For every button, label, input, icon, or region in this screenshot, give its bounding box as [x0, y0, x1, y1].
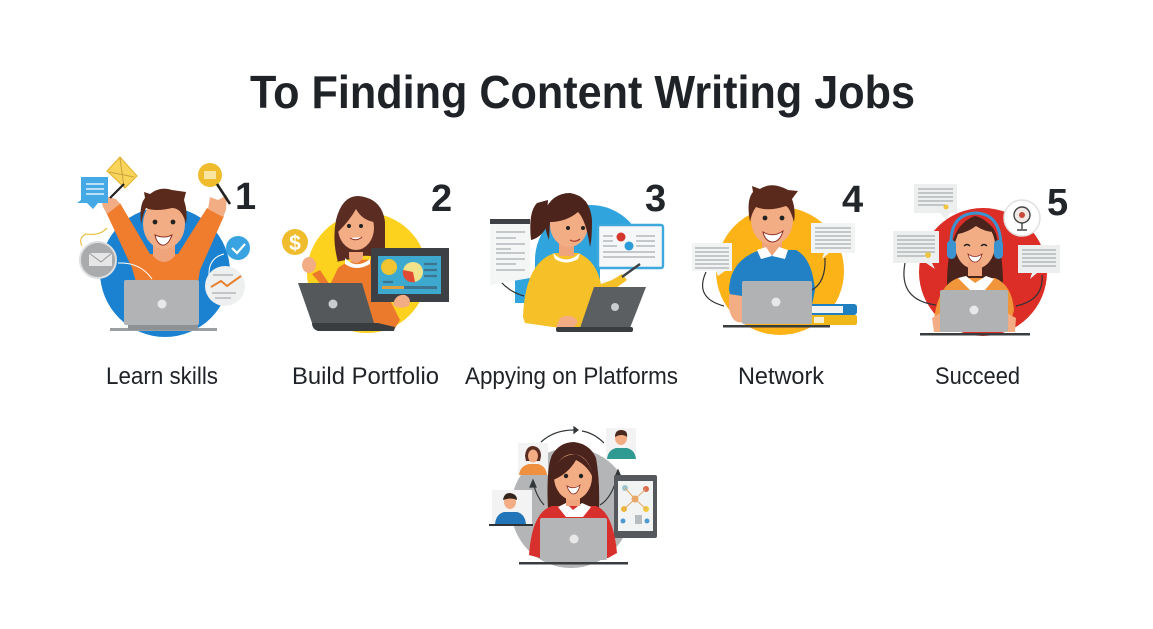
icon: globe badge	[1004, 200, 1040, 236]
label: succeed: Succeed	[935, 363, 1020, 390]
icon: laptop	[920, 290, 1030, 336]
icon: top speech bubble	[914, 184, 957, 220]
icon: yellow circle background	[716, 207, 844, 335]
label: build portfolio: Build Portfolio	[292, 363, 439, 390]
icon: chat bubble	[77, 177, 108, 209]
icon: woman presenting	[302, 196, 400, 330]
icon: screen panel	[598, 225, 663, 277]
step 1: learn skills	[77, 157, 256, 390]
icon: blue circle background	[515, 205, 645, 303]
icon: right speech bubble	[811, 223, 855, 290]
icon: avatar top right	[606, 428, 636, 459]
icon: left speech bubble	[893, 231, 939, 305]
icon: woman with ponytail	[523, 193, 627, 328]
icon: right speech bubble	[1016, 245, 1060, 306]
icon: woman in red	[529, 442, 617, 558]
icon: connection arrows	[530, 427, 621, 505]
step 2: build portfolio	[282, 178, 452, 390]
icon: blue circle background	[100, 207, 230, 337]
icon: dollar coin: $	[289, 232, 301, 255]
step 3: applying on platforms	[465, 178, 678, 390]
label: applying on platforms: Appying on Platforms	[465, 363, 678, 390]
icon: envelope on stick	[107, 157, 137, 198]
step 4: network	[692, 179, 863, 390]
icon: tablet	[614, 475, 657, 538]
number 2: 2	[431, 178, 452, 220]
icon: man in blue shirt	[729, 185, 815, 322]
icon: chart circle	[205, 254, 245, 306]
bottom illustration: networking woman	[489, 427, 657, 568]
icon: avatar top left	[518, 443, 548, 475]
icon: yellow mail coin	[198, 163, 230, 204]
icon: red circle background	[919, 208, 1047, 336]
number 1: 1	[235, 176, 256, 218]
icon: grey mail circle	[80, 228, 152, 279]
icon: avatar left	[489, 490, 533, 526]
title: To Finding Content Writing Jobs	[250, 66, 915, 118]
number 4: 4	[842, 179, 863, 221]
icon: check badge	[226, 236, 250, 260]
icon: man with raised arms	[102, 189, 227, 282]
icon: dollar coin	[282, 229, 308, 255]
icon: laptop	[723, 281, 830, 328]
icon: left speech bubble	[692, 243, 732, 306]
icon: presentation board	[371, 248, 449, 308]
icon: grey circle background	[511, 448, 631, 568]
icon: woman with headphones	[932, 213, 1016, 332]
icon: document window	[490, 219, 530, 296]
number 5: 5	[1047, 182, 1068, 224]
icon: laptop	[556, 287, 646, 332]
label: network: Network	[738, 363, 825, 390]
number 3: 3	[645, 178, 666, 220]
icon: stacked books	[810, 304, 857, 325]
label: learn skills: Learn skills	[106, 363, 218, 390]
icon: yellow circle background	[307, 213, 427, 333]
icon: laptop	[110, 280, 217, 331]
step 5: succeed	[893, 182, 1068, 390]
icon: laptop	[519, 518, 628, 564]
icon: laptop	[298, 283, 395, 331]
